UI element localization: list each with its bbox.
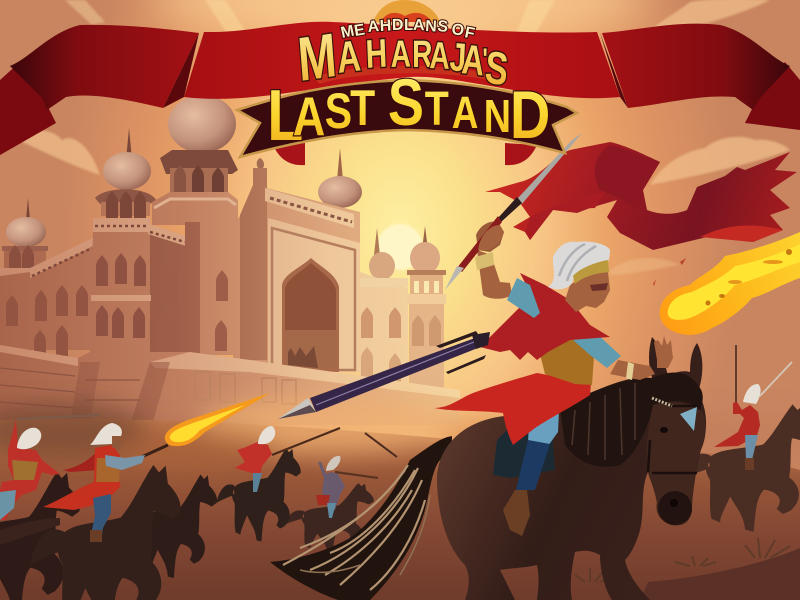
LAST STAND wordmark: A <box>452 88 478 138</box>
flying embers <box>653 258 762 325</box>
MAHARAJA'S wordmark: H <box>365 31 388 77</box>
red cape <box>480 273 610 360</box>
arch under subtitle <box>313 66 503 84</box>
helmet band <box>573 260 609 284</box>
right tower <box>407 226 446 389</box>
right rider group <box>682 345 800 530</box>
blaze <box>680 407 697 431</box>
LAST STAND wordmark: T <box>350 80 387 136</box>
far right dome behind gate <box>318 148 362 208</box>
MAHARAJA'S wordmark: A <box>336 32 362 83</box>
eye <box>660 427 668 433</box>
horse B <box>33 469 178 600</box>
LAST STAND wordmark: S <box>388 65 424 139</box>
red skirt <box>434 373 591 445</box>
small fireball <box>165 393 270 446</box>
left tail <box>0 62 56 155</box>
ground <box>0 419 800 600</box>
foreground lance <box>278 331 490 419</box>
rider C horse <box>125 476 216 577</box>
plaque tails <box>273 143 305 165</box>
spear <box>365 433 397 457</box>
small right dome <box>369 228 395 280</box>
sword <box>17 415 100 419</box>
sun rays <box>65 0 555 35</box>
rider D figure <box>235 442 272 476</box>
far left dome tower <box>0 198 50 276</box>
dark foreground hill <box>640 548 800 600</box>
right rider figure <box>714 402 760 447</box>
haze <box>0 397 800 472</box>
MAHARAJA'S wordmark: M <box>295 20 339 95</box>
LAST STAND wordmark: D <box>510 78 550 153</box>
horse D <box>217 449 300 541</box>
red flag <box>485 142 797 250</box>
left tower with dome <box>90 128 186 355</box>
main rider <box>434 222 673 536</box>
rider D group <box>217 426 340 541</box>
fortress base wall <box>0 345 460 425</box>
MAHARAJA'S wordmark: ' <box>482 42 488 76</box>
muzzle <box>658 491 692 525</box>
grass tufts <box>575 538 790 582</box>
MAHARAJA'S wordmark: A <box>429 35 450 78</box>
left banner segment <box>10 25 199 110</box>
LAST STAND wordmark: A <box>293 85 325 147</box>
right banner segment <box>602 24 790 110</box>
MAHARAJA'S wordmark: R <box>412 34 432 76</box>
LAST STAND wordmark: S <box>325 83 352 139</box>
MAHARAJA'S wordmark: S <box>483 40 510 96</box>
lance D <box>272 428 340 455</box>
right lances <box>735 345 737 410</box>
left wall <box>0 238 93 361</box>
raised arm <box>477 250 512 299</box>
rider E figure <box>318 462 345 510</box>
bridle <box>648 398 697 473</box>
horseman blanket <box>493 405 555 478</box>
horse A <box>0 474 78 600</box>
MAHARAJA'S wordmark: J <box>449 35 467 81</box>
rider B figure <box>43 445 123 510</box>
main horse tail <box>270 436 452 600</box>
ornament crown <box>373 0 440 22</box>
central gateway <box>233 158 408 385</box>
center banner <box>184 22 620 99</box>
main horse <box>437 337 706 600</box>
gold torso <box>540 335 595 385</box>
face <box>565 272 610 312</box>
LAST STAND wordmark: N <box>484 90 511 142</box>
sun <box>377 224 423 270</box>
subtitle: ME AHDLANS OF <box>339 17 476 43</box>
blue sleeve <box>507 278 540 318</box>
head <box>647 402 706 525</box>
top glow <box>150 0 650 45</box>
title banner <box>0 0 800 165</box>
rider B group <box>0 423 178 600</box>
LAST STAND wordmark: T <box>425 82 449 136</box>
rider E group <box>286 433 397 553</box>
MAHARAJA'S wordmark: A <box>390 34 411 76</box>
fort <box>0 68 460 425</box>
LAST STAND wordmark: L <box>267 74 303 155</box>
dark plaque <box>237 80 577 157</box>
rider legs <box>503 390 560 536</box>
right arm <box>610 360 655 380</box>
rider A group <box>0 415 100 600</box>
cape B <box>63 450 100 472</box>
raised spear <box>445 133 582 290</box>
right horse <box>682 406 800 530</box>
horse E <box>286 484 373 553</box>
plumed helmet <box>548 242 610 289</box>
main fireball <box>660 232 800 335</box>
MAHARAJA'S wordmark: A <box>460 36 486 85</box>
right tail <box>745 62 800 130</box>
mane <box>560 373 703 467</box>
fire lance B <box>135 445 168 460</box>
main domed tower <box>152 68 238 356</box>
rider A figure <box>0 420 60 520</box>
clouds <box>18 0 790 275</box>
